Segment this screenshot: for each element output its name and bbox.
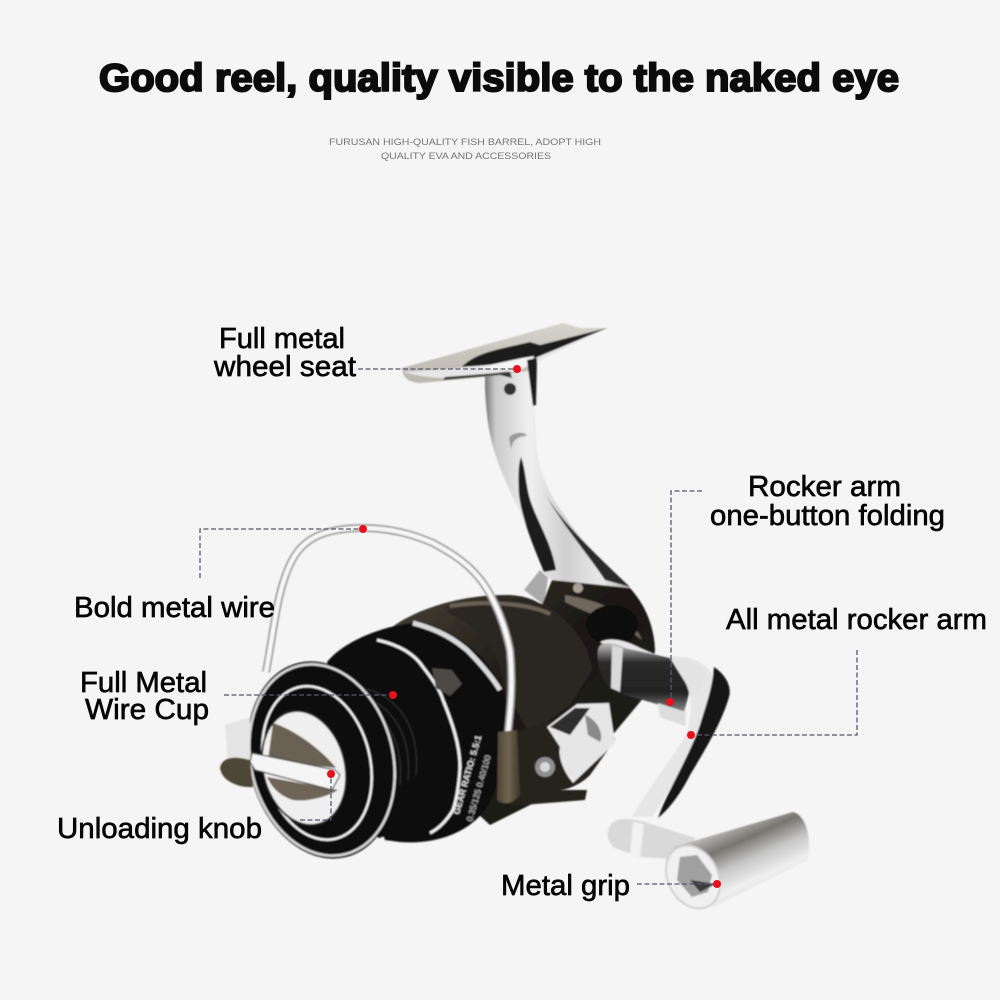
- bail arm connector: [497, 730, 520, 803]
- label: rocker arm folding: Rocker arm: [748, 471, 901, 503]
- reel illustration: [220, 323, 809, 918]
- reel body: [388, 580, 655, 825]
- unloading knob: [250, 723, 340, 801]
- label: unloading knob: Unloading knob: [57, 813, 262, 845]
- reel foot and stem: [402, 323, 632, 605]
- label: all metal rocker arm: [687, 604, 987, 739]
- handle grip: [608, 812, 809, 918]
- label: all metal rocker arm: All metal rocker arm: [726, 604, 987, 636]
- label: rocker arm folding: [666, 471, 945, 706]
- label: metal grip: Metal grip: [501, 870, 630, 902]
- label: bold metal wire: [74, 525, 367, 624]
- label: wire cup: [80, 667, 397, 726]
- handle arm: [598, 640, 730, 818]
- label: wire cup: Full Metal: [80, 667, 207, 699]
- label: wheel seat: wheel seat: [213, 351, 356, 383]
- label: bold metal wire: Bold metal wire: [74, 592, 275, 624]
- bail wire: [266, 528, 511, 732]
- label: wire cup: Wire Cup: [85, 694, 209, 726]
- label: metal grip: [501, 870, 721, 902]
- title: Good reel, quality visible to the naked eye: [99, 57, 899, 100]
- side plate and screw: [505, 703, 615, 806]
- spool: [227, 622, 507, 875]
- spool: 0.35/125 0.40/100: [464, 754, 493, 823]
- label: rocker arm folding: one-button folding: [710, 500, 945, 532]
- label: unloading knob: [57, 770, 335, 845]
- subtitle: QUALITY EVA AND ACCESSORIES: [381, 151, 551, 162]
- subtitle: FURUSAN HIGH-QUALITY FISH BARREL, ADOPT HIGH: [329, 137, 601, 148]
- printed gear ratio text: GEAR RATIO: 5.5:1: [451, 734, 483, 816]
- label: wheel seat: [213, 323, 521, 383]
- subtitle: [329, 137, 601, 162]
- label: wheel seat: Full metal: [219, 323, 345, 355]
- rear knob cap: [220, 717, 253, 787]
- front flange: [227, 645, 417, 875]
